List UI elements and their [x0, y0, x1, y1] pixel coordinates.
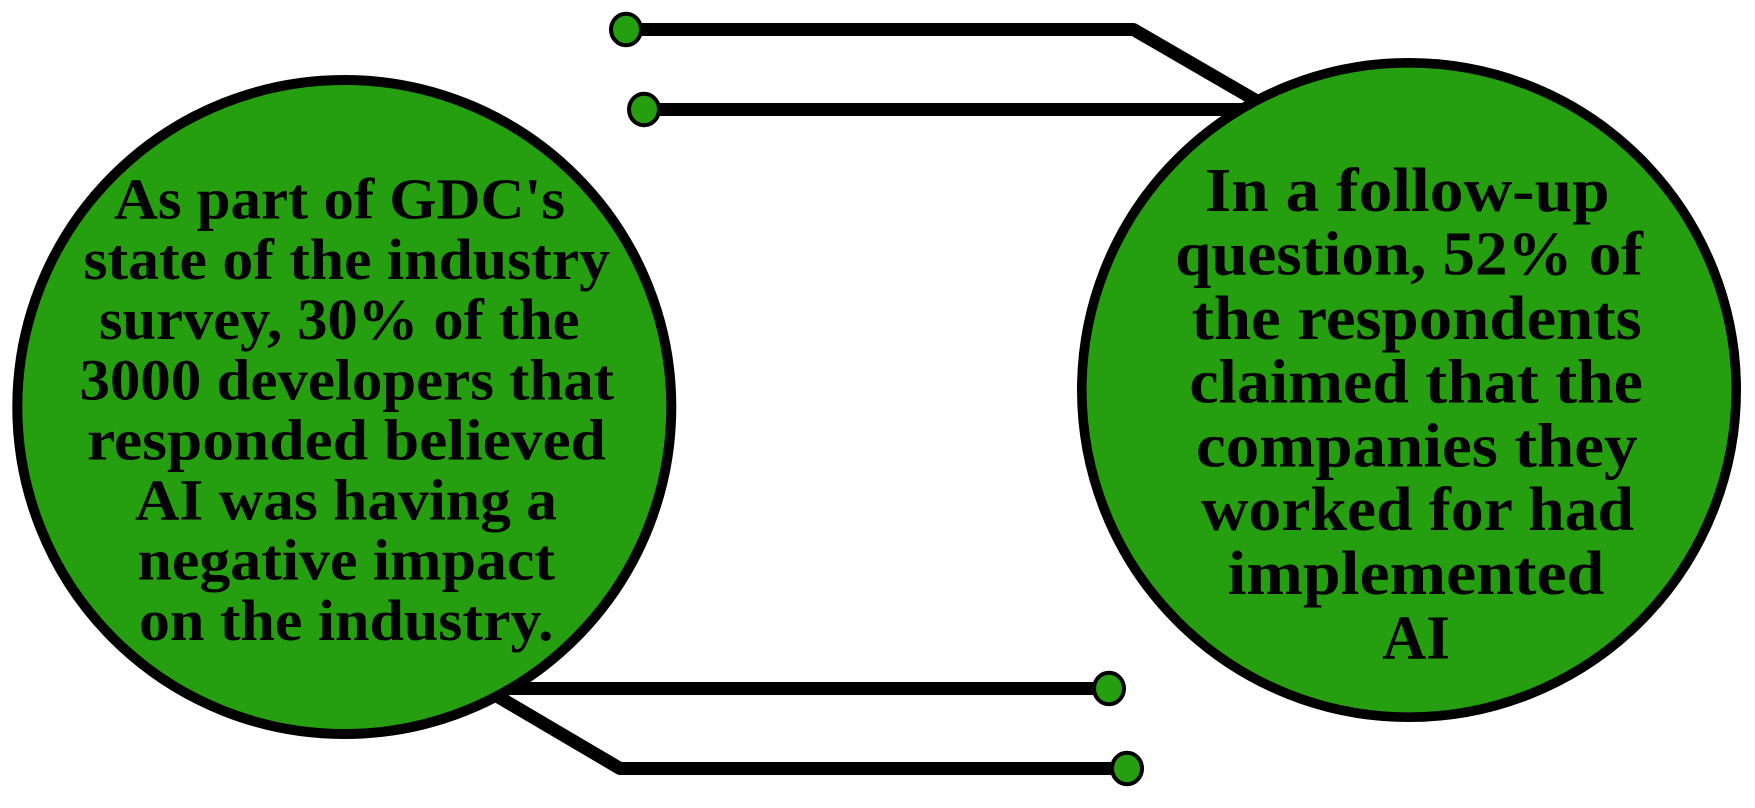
panel: left circle, 30% negative impact — [17, 80, 671, 734]
text block: GDC survey statistic: responded believed — [87, 408, 606, 472]
icon: green dot, lower — [629, 94, 659, 125]
text block: GDC survey statistic: As part of GDC's — [114, 166, 565, 232]
connector: top lines from the right circle — [611, 14, 1262, 125]
icon: green dot, upper — [611, 14, 641, 45]
connector line: upper straight — [490, 682, 1109, 695]
text block: follow-up question statistic: companies they — [1196, 412, 1638, 480]
text block: GDC survey statistic: survey, 30% of the — [99, 287, 580, 352]
connector line: upper elbow — [626, 30, 1262, 104]
text block: GDC survey statistic: AI was having a — [135, 468, 557, 532]
circle background, left — [17, 80, 671, 734]
text block: GDC survey statistic — [80, 166, 615, 653]
text block: follow-up question statistic: In a follow-up — [1205, 157, 1610, 225]
connector: bottom lines from the left circle — [490, 673, 1142, 784]
text block: follow-up question statistic: implemented — [1228, 540, 1604, 608]
text block: GDC survey statistic: 3000 developers that — [80, 347, 615, 412]
icon: green dot, lower — [1112, 753, 1142, 784]
text block: follow-up question statistic: question, 52% of — [1175, 221, 1644, 289]
connector line: lower straight — [644, 103, 1262, 116]
circle background, right — [1082, 63, 1736, 717]
text block: follow-up question statistic: claimed that the — [1189, 349, 1643, 417]
connector line: lower elbow — [490, 692, 1127, 768]
text block: GDC survey statistic: state of the industry — [84, 227, 610, 292]
panel: right circle, 52% implemented AI — [1082, 63, 1736, 717]
text block: GDC survey statistic: on the industry. — [139, 588, 554, 653]
text block: follow-up question statistic: AI — [1382, 604, 1450, 672]
icon: green dot, upper — [1094, 673, 1124, 704]
text block: follow-up question statistic: the respondents — [1192, 285, 1642, 353]
text block: GDC survey statistic: negative impact — [138, 528, 556, 592]
text block: follow-up question statistic — [1175, 157, 1644, 672]
text block: follow-up question statistic: worked for had — [1201, 476, 1634, 544]
